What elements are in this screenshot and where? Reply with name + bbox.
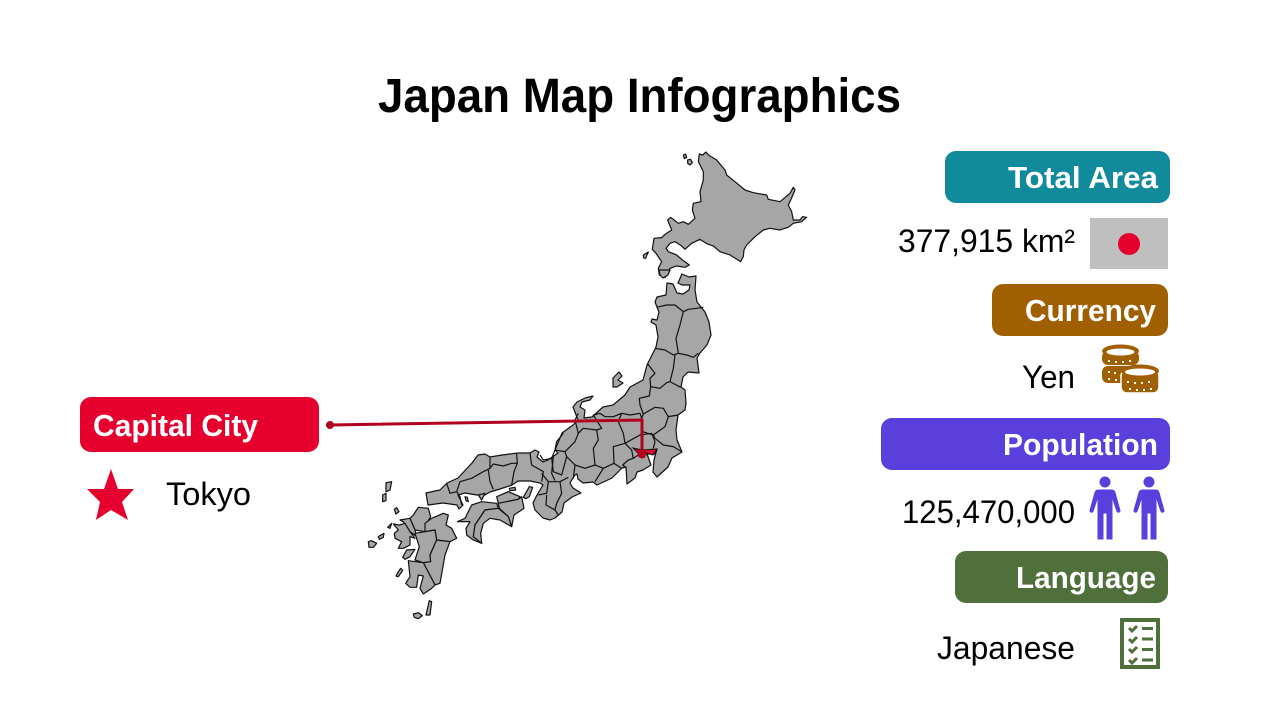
title: Japan Map Infographics (378, 70, 901, 123)
population heading (881, 418, 1170, 470)
currency heading (992, 284, 1168, 336)
total area heading: Total Area (1008, 160, 1159, 195)
capital city value: Tokyo (166, 476, 251, 512)
panel: total area (898, 151, 1170, 269)
region: Tokyo highlight (633, 448, 657, 457)
map of Japan (368, 152, 807, 619)
icon: coins (1102, 344, 1159, 393)
currency heading: Currency (1025, 293, 1157, 328)
total area value: 377,915 km² (898, 223, 1075, 259)
region: Shikoku prefectures (457, 492, 524, 543)
total area heading (945, 151, 1170, 203)
currency value: Yen (1022, 359, 1075, 395)
region: Kanto and Chubu prefecture borders (639, 387, 682, 452)
panel: currency (992, 284, 1168, 395)
region: Tohoku prefecture borders (647, 305, 703, 388)
region: Hokkaido (643, 152, 807, 278)
region: Kyushu and southern islands (368, 482, 457, 619)
leader line from Capital City to Tokyo (326, 420, 646, 458)
icon: checklist (1122, 620, 1158, 667)
capital city heading (80, 397, 319, 452)
icon: person (1089, 476, 1121, 540)
language value: Japanese (937, 630, 1075, 666)
region: Inland Sea islands (465, 487, 533, 502)
population heading: Population (1003, 427, 1158, 462)
panel: population (881, 418, 1170, 540)
population value: 125,470,000 (902, 494, 1075, 530)
region: Honshu landmass (426, 270, 711, 520)
language heading (955, 551, 1168, 603)
panel: language (937, 551, 1168, 667)
region: central Honshu prefecture borders (540, 413, 655, 482)
icon: star (87, 469, 134, 520)
region: Kinki and Chugoku prefecture borders (447, 453, 568, 543)
icon: Japanese flag (1090, 218, 1168, 269)
capital city heading: Capital City (93, 408, 259, 443)
language heading: Language (1016, 560, 1156, 595)
icon: person (1133, 476, 1165, 540)
